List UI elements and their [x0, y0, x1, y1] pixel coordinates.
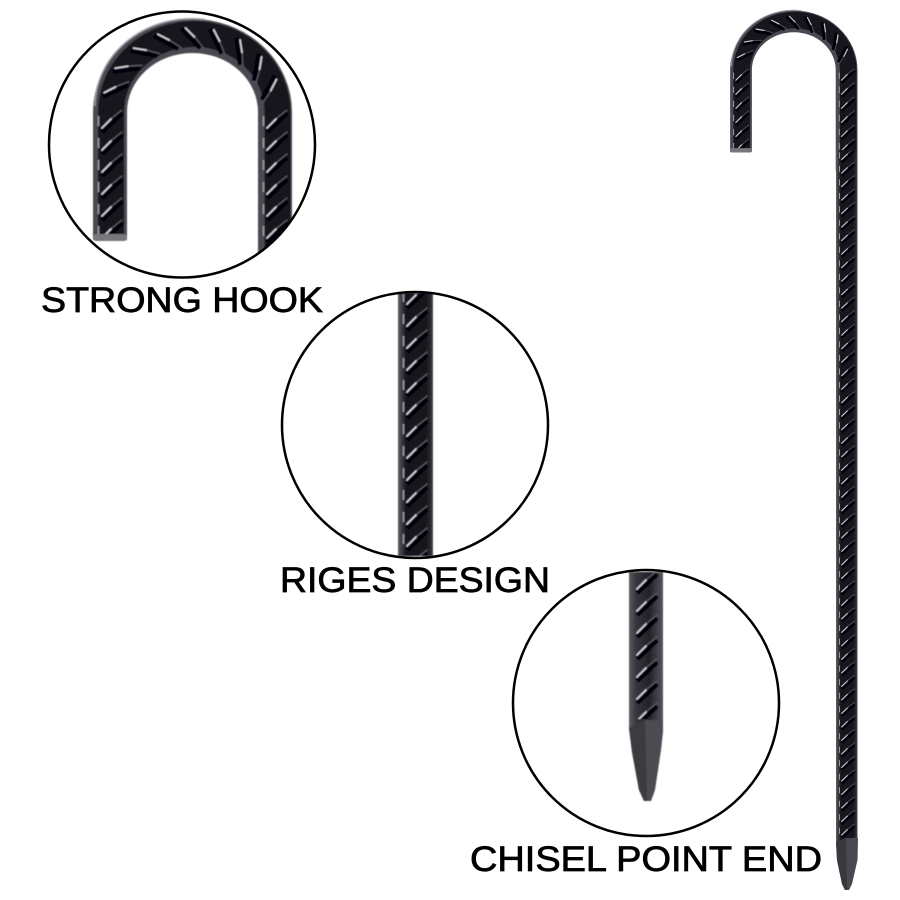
icon: chisel point shaft: [629, 572, 663, 801]
circle outline: ridges: [282, 292, 548, 558]
panel: ridges design close-up: [280, 292, 550, 600]
full stake illustration: [730, 10, 858, 890]
stake shaft with ribs: [836, 150, 858, 842]
icon: ribbed shaft close-up: [398, 293, 433, 556]
heading: chisel point end: CHISEL POINT END: [470, 840, 822, 879]
icon: stake hook: [730, 10, 857, 171]
panel: chisel point close-up: [470, 570, 822, 879]
panel: strong hook close-up: [41, 12, 323, 320]
circle outline: hook: [49, 12, 315, 278]
heading: riges design: RIGES DESIGN: [280, 561, 550, 600]
icon: hook close-up: [93, 19, 292, 270]
circle outline: chisel: [513, 570, 779, 836]
heading: strong hook: STRONG HOOK: [41, 281, 323, 320]
stake chisel tip: [836, 838, 858, 890]
